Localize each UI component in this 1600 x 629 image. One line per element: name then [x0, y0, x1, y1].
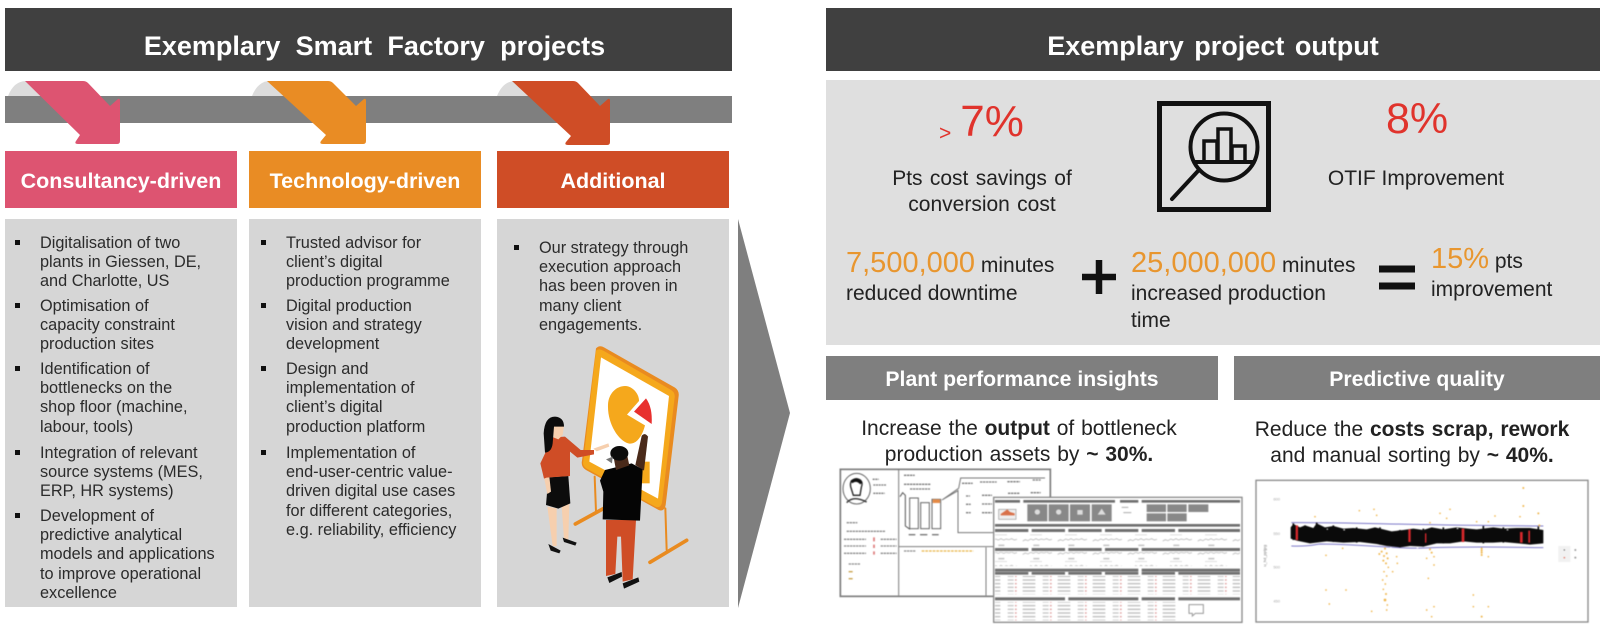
equation: production time: increased production: [1131, 282, 1326, 304]
bullet: identification: bottlenecks on the: [40, 379, 172, 397]
man: [600, 434, 648, 589]
bullet: development: predictive analytical: [40, 526, 182, 544]
legend: [1558, 546, 1570, 562]
bullet: trusted advisor: production programme: [286, 272, 450, 290]
panel: technology-driven list: [249, 219, 481, 607]
text: output claim: Increase the output of bottleneck: [861, 417, 1177, 440]
bullet: strategy: engagements.: [539, 316, 642, 334]
axis labels: u_hd_ppljpg: [1262, 545, 1267, 567]
bullet: strategy: has been proven in: [539, 277, 678, 295]
bullet: development: models and applications: [40, 545, 215, 563]
axis labels: 450: [1273, 598, 1281, 603]
bullet: trusted advisor: client’s digital: [286, 253, 383, 271]
symbol: plus: [1082, 260, 1116, 294]
bullet: digitalisation: Digitalisation of two: [40, 234, 180, 252]
equation: downtime: reduced downtime: [846, 282, 1018, 304]
text: cost claim: Reduce the costs scrap, rework: [1255, 418, 1569, 441]
scatter plot: predictive quality: [1254, 479, 1590, 624]
bullet: use cases: Implementation of: [286, 444, 415, 462]
panel: consultancy-driven list: [5, 219, 237, 607]
symbol: equals: [1379, 266, 1415, 290]
bullet: platform: production platform: [286, 418, 425, 436]
bullet: digitalisation: [40, 234, 201, 292]
caption: cost savings: conversion cost: [908, 193, 1056, 216]
heading: Exemplary Smart Factory projects: [5, 8, 732, 71]
equation: production time: 25,000,000 minutes: [1131, 247, 1356, 279]
arrow: consultancy: [8, 81, 120, 144]
bullet: platform: Design and: [286, 360, 368, 378]
caption: cost savings: [892, 167, 1072, 216]
equation: production time: time: [1131, 309, 1171, 332]
bullet: platform: implementation of: [286, 379, 415, 397]
bullet: digitalisation: and Charlotte, US: [40, 272, 169, 290]
panel: additional: [497, 219, 729, 607]
bullet: vision: Digital production: [286, 297, 412, 315]
bullet: optimisation: Optimisation of: [40, 297, 149, 315]
heading box: Technology-driven: [249, 151, 481, 208]
bullet: use cases: e.g. reliability, efficiency: [286, 521, 456, 539]
heading box: Additional: [497, 151, 729, 208]
bullet: digitalisation: plants in Giessen, DE,: [40, 253, 201, 271]
board: [582, 346, 679, 510]
heading: Exemplary project output: [826, 8, 1600, 71]
control limits: [1291, 523, 1543, 548]
grey timeline band with three folded arrows: [5, 81, 732, 145]
bullet: use cases: end-user-centric value-: [286, 463, 453, 481]
bullet: identification: shop floor (machine,: [40, 398, 188, 416]
heading box: Additional: Additional: [560, 169, 666, 193]
bullet: trusted advisor: [286, 234, 450, 292]
woman: [540, 417, 609, 553]
bullet: development: to improve operational: [40, 565, 201, 583]
heading: Plant performance insights: [826, 356, 1218, 400]
bullet: use cases: for different categories,: [286, 502, 452, 520]
bullet: development: Development of: [40, 507, 154, 525]
equation: improvement: improvement: [1431, 278, 1552, 301]
data band: [1291, 523, 1543, 547]
bullet: trusted advisor: Trusted advisor for: [286, 234, 421, 252]
text: cost claim: [1255, 418, 1570, 467]
bullet: identification: Identification of: [40, 360, 150, 378]
text: cost claim: and manual sorting by ~ 40%.: [1270, 444, 1554, 467]
bullet: optimisation: capacity constraint: [40, 316, 175, 334]
bullet: integration: source systems (MES,: [40, 463, 203, 481]
metric: 8%: 8%: [1386, 95, 1448, 143]
bullet: identification: labour, tools): [40, 418, 133, 436]
text: output claim: [861, 417, 1177, 466]
equation: improvement: [1431, 243, 1552, 301]
illustration: two people at a pie chart board: [540, 346, 689, 589]
bullet: vision: [286, 297, 422, 355]
axis labels: [1262, 497, 1281, 603]
bullet: strategy: Our strategy through: [539, 239, 688, 257]
bullet: development: [40, 507, 215, 603]
panel: exemplary output: [826, 80, 1600, 345]
bullet: strategy: [539, 239, 688, 335]
bullet: platform: [286, 360, 425, 437]
caption: cost savings: Pts cost savings of: [892, 167, 1072, 190]
bullet: development: excellence: [40, 584, 117, 602]
heading: Plant performance insights: Plant performance insights: [885, 368, 1159, 391]
heading: Exemplary Smart Factory projects: Exemplary Smart Factory projects: [144, 31, 605, 61]
bullet: vision: development: [286, 335, 379, 353]
big grey arrow: [738, 219, 790, 608]
dashboard screenshot: [994, 497, 1242, 622]
equation: downtime: 7,500,000 minutes: [846, 247, 1054, 279]
bullet: integration: [40, 444, 203, 502]
text: output claim: production assets by ~ 30%.: [885, 443, 1153, 466]
arrow: technology: [252, 81, 366, 144]
heading box: Technology-driven: Technology-driven: [270, 169, 460, 193]
heading box: Consultancy-driven: [5, 151, 237, 208]
heading: Exemplary project output: Exemplary project output: [1047, 31, 1379, 61]
bullet: use cases: [286, 444, 456, 540]
bullet: identification: [40, 360, 188, 437]
axis labels: 600: [1273, 497, 1281, 502]
heading box: Consultancy-driven: Consultancy-driven: [21, 169, 221, 193]
icon: magnifier over bar chart: [1157, 101, 1271, 212]
outlier dots: [1314, 487, 1540, 618]
equation: production time: [1131, 247, 1356, 332]
bullet: strategy: execution approach: [539, 258, 681, 276]
caption: OTIF: OTIF Improvement: [1328, 167, 1504, 190]
bullet: platform: client’s digital: [286, 398, 383, 416]
bullet: vision: vision and strategy: [286, 316, 422, 334]
heading: Predictive quality: Predictive quality: [1329, 368, 1505, 391]
bullet: integration: ERP, HR systems): [40, 482, 174, 500]
bullet: optimisation: [40, 297, 175, 355]
arrow: additional: [497, 81, 610, 145]
axis labels: 500: [1273, 564, 1281, 569]
bullet: use cases: driven digital use cases: [286, 482, 455, 500]
metric: more than 7%: >7%: [939, 97, 1024, 146]
easel legs: [575, 477, 687, 562]
bullet: strategy: many client: [539, 297, 621, 315]
equation: improvement: 15% pts: [1431, 243, 1523, 275]
sketch wireframe: [840, 469, 1050, 596]
bullet: optimisation: production sites: [40, 335, 154, 353]
axis labels: 550: [1273, 531, 1281, 536]
heading: Predictive quality: [1234, 356, 1600, 400]
equation: downtime: [846, 247, 1054, 304]
bullet: integration: Integration of relevant: [40, 444, 198, 462]
screenshots: sketch wireframe and dashboard: [838, 468, 1244, 624]
